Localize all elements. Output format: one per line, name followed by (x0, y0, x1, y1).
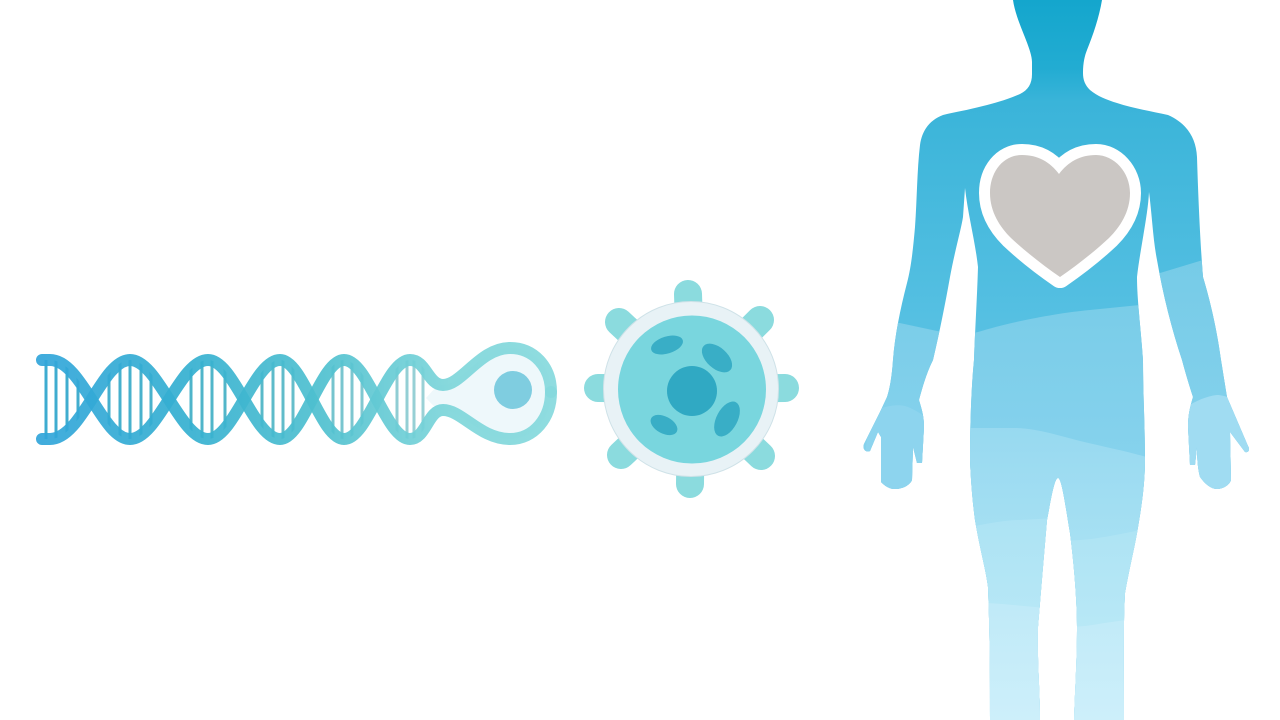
human body silhouette (850, 0, 1260, 720)
cell nucleus (667, 366, 717, 416)
fifth colour band (988, 604, 1124, 720)
organelles (647, 332, 745, 441)
hand shading (866, 395, 1249, 489)
DNA strand A (42, 360, 551, 439)
upper body colour (850, 0, 1260, 720)
cytoplasm (618, 316, 766, 464)
DNA helix turning into a cell (42, 348, 551, 450)
fourth colour band (976, 519, 1138, 626)
cell membrane ring (604, 302, 778, 476)
icon: heart (990, 155, 1130, 277)
DNA strand B (42, 348, 551, 439)
cell surface bumps (598, 294, 785, 484)
DNA rungs (44, 360, 424, 439)
second colour band (850, 255, 1260, 720)
nucleus of bulb cell (494, 371, 532, 409)
cell (598, 294, 785, 484)
third colour band (970, 428, 1145, 540)
cell bulb fill at end of DNA (426, 348, 551, 439)
